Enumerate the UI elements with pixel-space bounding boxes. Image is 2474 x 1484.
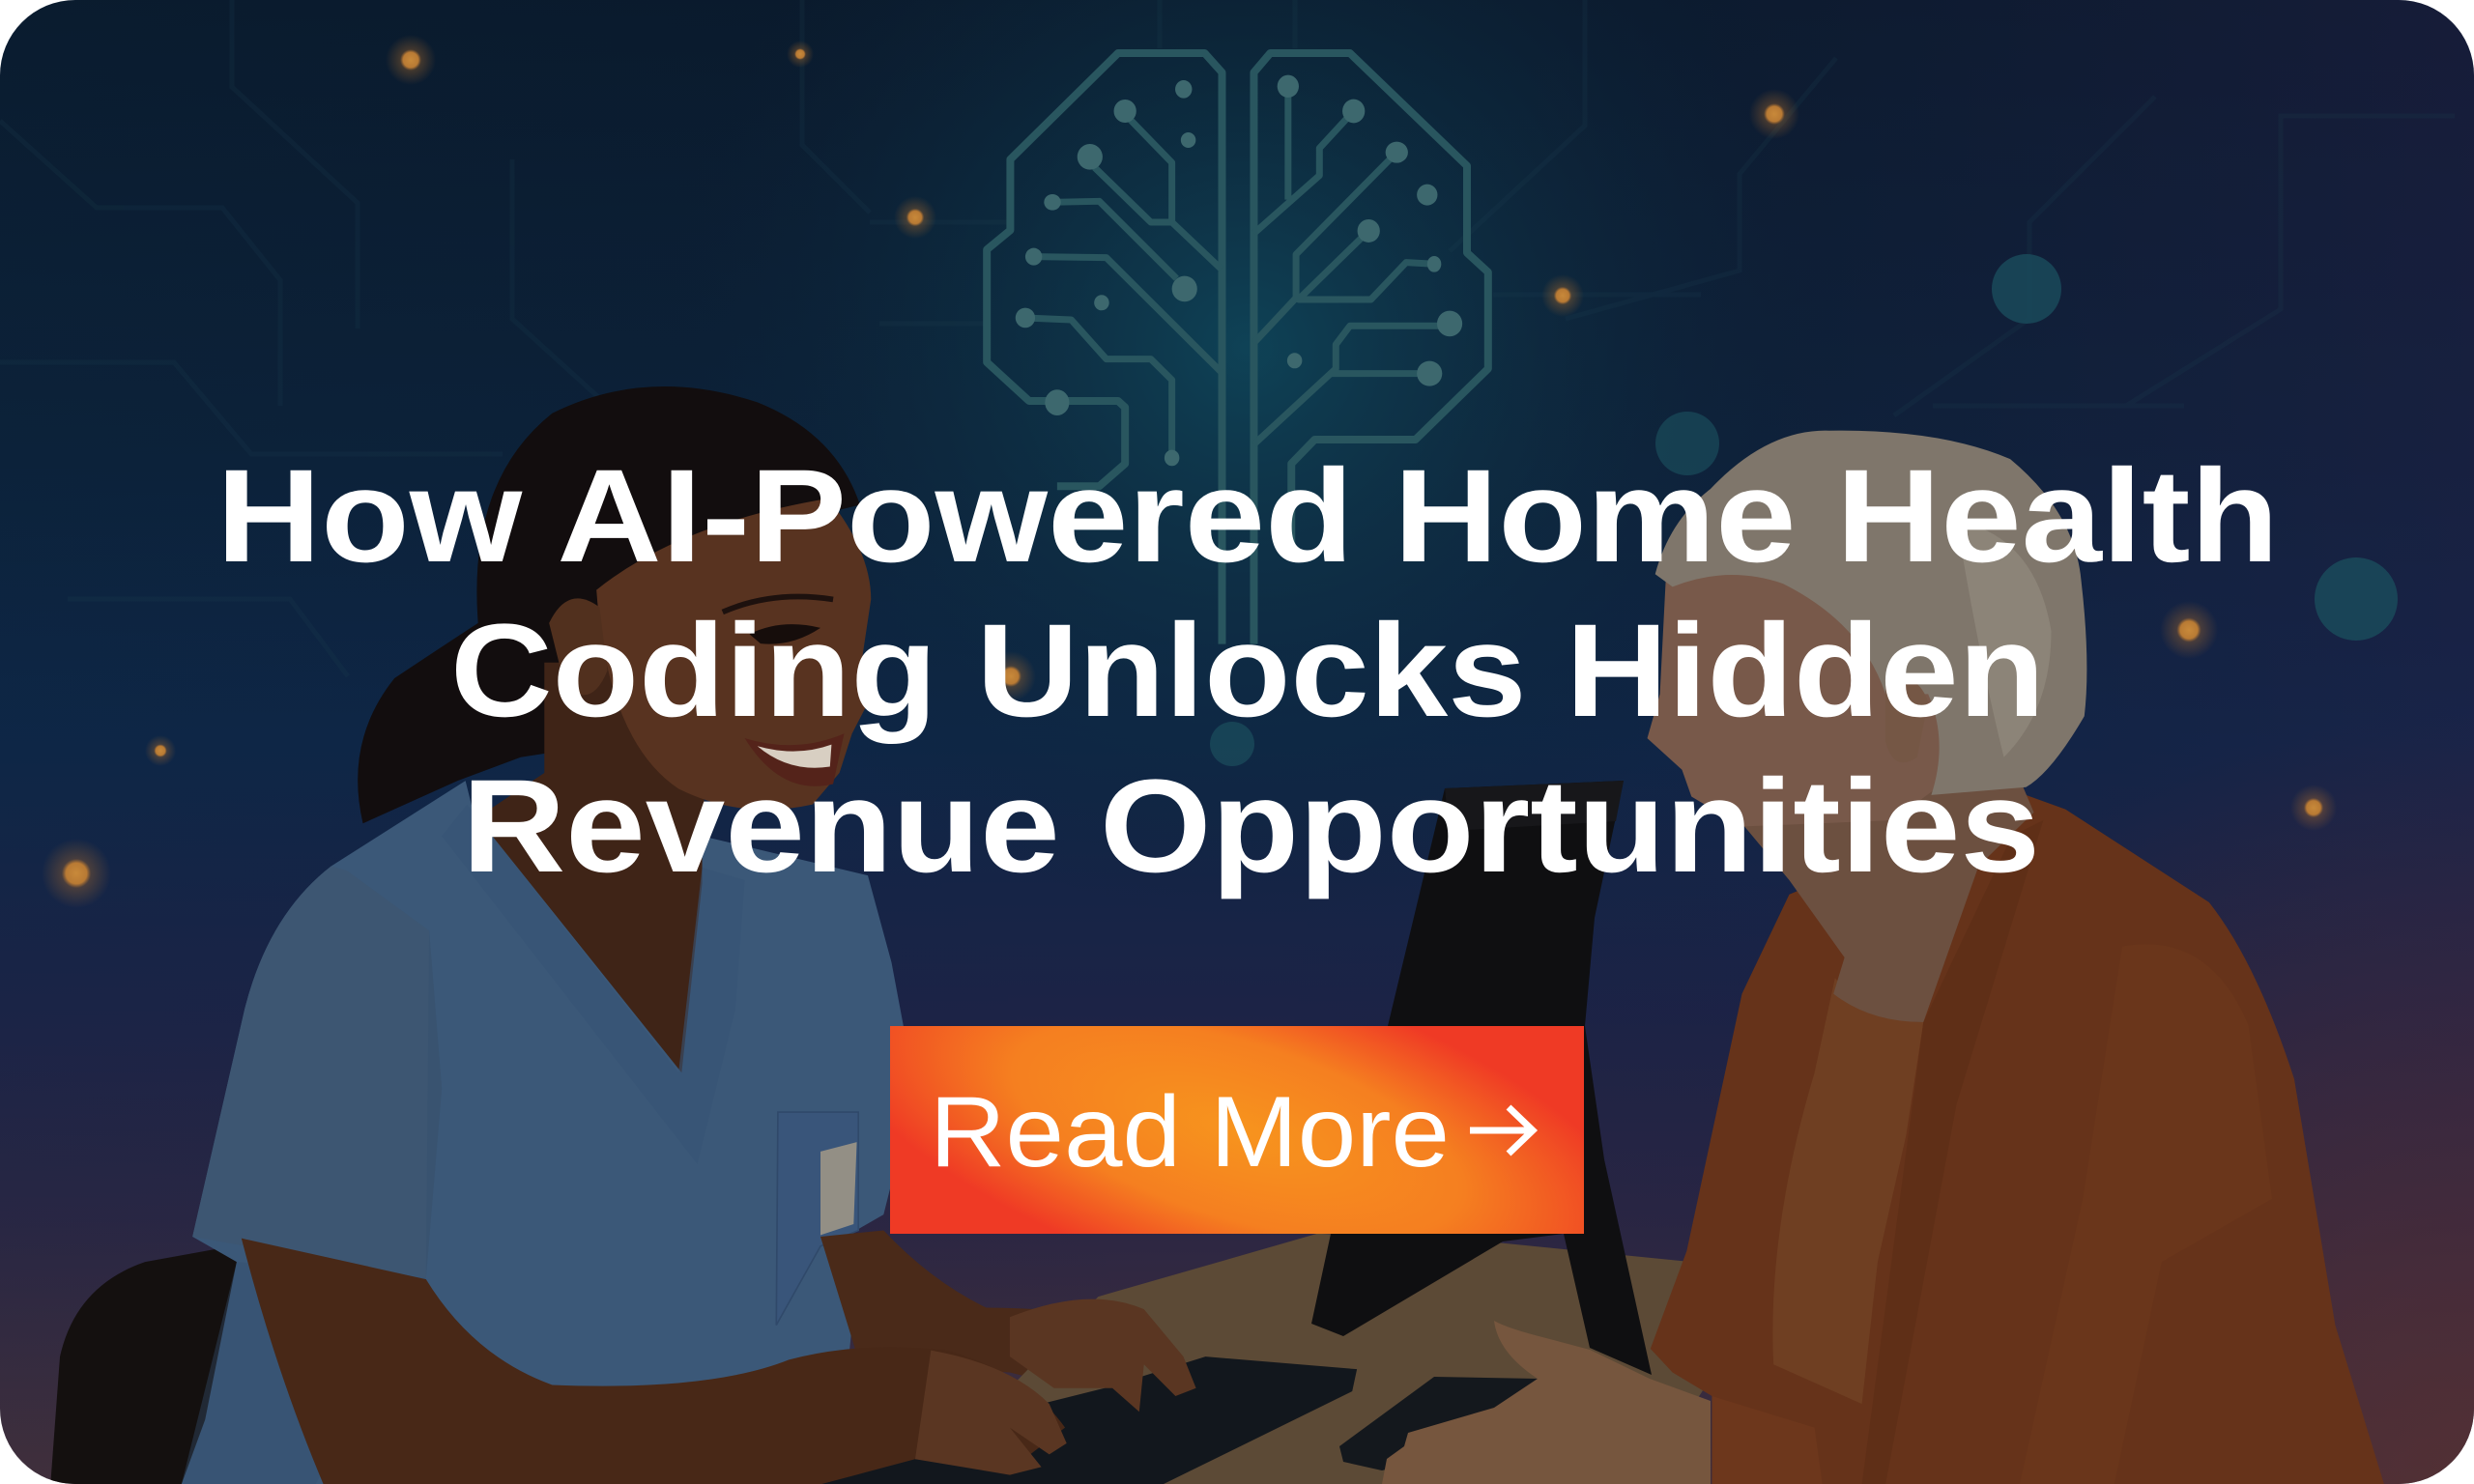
right hemisphere outline: [1253, 53, 1488, 644]
nurse ear: [549, 598, 608, 695]
nurse teeth: [758, 745, 831, 768]
patient hair: [1655, 431, 2086, 795]
faint circuit traces: [0, 0, 2455, 676]
desk surface: [1010, 1234, 1736, 1484]
nurse smile: [745, 733, 844, 786]
keyboard: [820, 1356, 1357, 1484]
patient cuff: [1712, 1396, 1823, 1484]
illustration: computer monitor and phone: [1311, 781, 1652, 1470]
headline line 2: Coding Unlocks Hidden: [450, 597, 2045, 745]
nurse near fingers: [915, 1351, 1067, 1475]
cardigan lapel: [1862, 820, 2043, 1484]
nurse ponytail and hair: [358, 386, 860, 823]
nurse far fingers: [1010, 1299, 1196, 1412]
patient cardigan: [1651, 795, 2384, 1484]
right hemisphere traces: [1258, 97, 1438, 445]
nurse far forearm: [820, 1231, 1199, 1396]
headline line 3: Revenue Opportunities: [462, 753, 2040, 900]
patient hand: [1382, 1321, 1711, 1484]
decorative teal bubbles: [1210, 254, 2398, 766]
nurse face: [596, 499, 873, 810]
button label: Read More: [930, 1076, 1450, 1188]
headline line 1: How AI-Powered Home Health: [216, 442, 2279, 590]
illustration: nurse: [50, 386, 1736, 1484]
patient inner shirt: [1772, 978, 1923, 1404]
scrubs sleeve shade: [192, 866, 442, 1277]
brain nodes: [1016, 75, 1462, 466]
left hemisphere traces: [1025, 119, 1222, 457]
patient hair highlight: [1957, 521, 2052, 757]
patient face: [1648, 556, 1965, 827]
nurse scrubs: [182, 781, 915, 1484]
glowing orange particles: [42, 35, 2337, 908]
scrubs pocket: [776, 1112, 858, 1325]
illustration: elderly patient: [1648, 431, 2384, 1484]
office chair: [50, 1243, 249, 1484]
nurse neck: [492, 663, 710, 1072]
headline: [216, 442, 2279, 900]
phone: [1339, 1377, 1538, 1470]
name badge: [820, 1142, 857, 1235]
cardigan sleeve shade: [2020, 944, 2272, 1484]
left hemisphere outline: [987, 53, 1222, 644]
patient ear: [1885, 676, 1928, 762]
nurse eye: [750, 624, 820, 644]
icon: arrow: [1470, 1107, 1533, 1154]
patient neck: [1742, 741, 2034, 1022]
button: Read More: [890, 1026, 1584, 1234]
scrubs V-neck collar: [442, 805, 745, 1164]
nurse near arm: [242, 1239, 1065, 1484]
illustration: circuit brain: [987, 53, 1488, 644]
nurse brow: [723, 596, 833, 612]
